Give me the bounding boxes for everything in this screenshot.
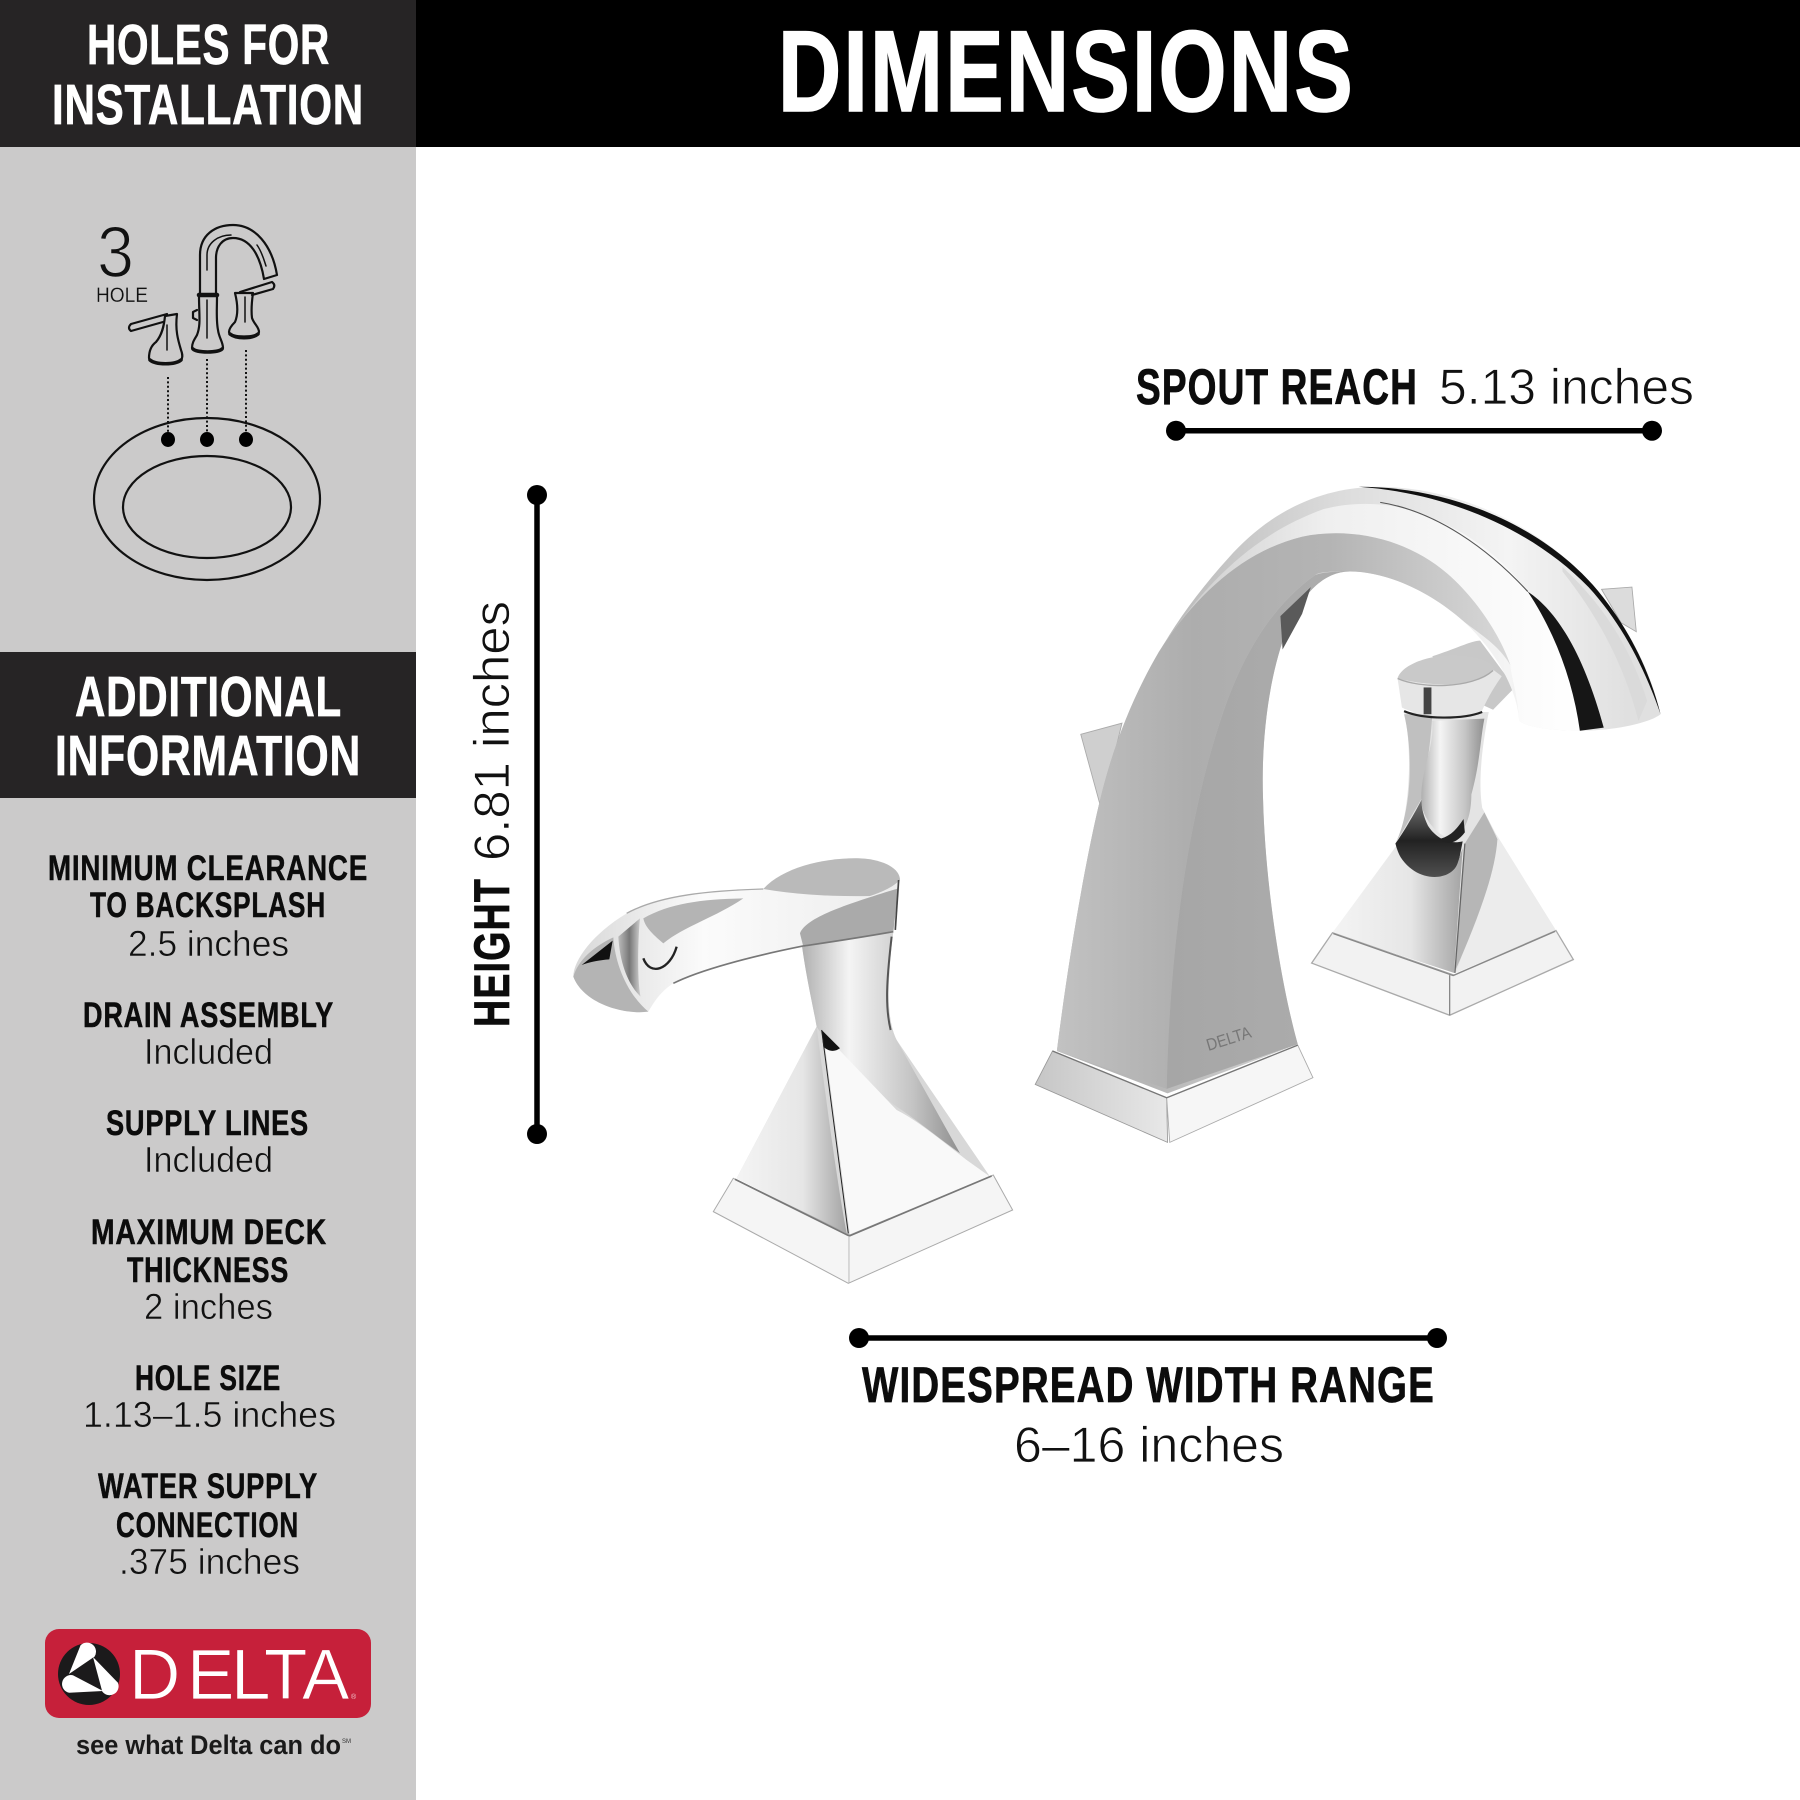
label: 3 hole: 3	[97, 213, 134, 293]
back lever tabs	[1081, 587, 1636, 806]
text block: water supply connection: .375 inches	[119, 1541, 300, 1582]
dimension: widespread width range: 6–16 inches	[1014, 1417, 1284, 1473]
dimension: height: HEIGHT	[464, 878, 520, 1027]
heading: holes for installation: INSTALLATION	[52, 73, 364, 137]
icon: basin	[94, 418, 320, 580]
icon: three hole sink diagram	[94, 213, 320, 580]
text block: drain assembly: DRAIN ASSEMBLY	[83, 996, 334, 1035]
text block: hole size	[83, 1359, 336, 1435]
text block: water supply connection	[98, 1467, 318, 1582]
text block: drain assembly: Included	[144, 1031, 273, 1072]
handle lever	[573, 858, 900, 1012]
dimension: height: 6.81 inches	[464, 601, 520, 861]
heading: additional information: INFORMATION	[55, 724, 361, 788]
text block: water supply connection: WATER SUPPLY	[98, 1467, 318, 1506]
label: 3 hole: HOLE	[96, 284, 148, 307]
text block: maximum deck thickness: 2 inches	[144, 1286, 273, 1327]
dimension: spout reach	[1136, 359, 1694, 441]
text block: minimum clearance	[48, 849, 368, 964]
text block: maximum deck thickness: MAXIMUM DECK	[91, 1213, 327, 1252]
text block: water supply connection: CONNECTION	[116, 1506, 299, 1545]
spout body	[1057, 487, 1661, 1093]
text block: supply lines: SUPPLY LINES	[106, 1104, 309, 1143]
heading: holes for installation	[0, 0, 416, 147]
text block: supply lines: Included	[144, 1139, 273, 1180]
dimension: height	[464, 485, 547, 1144]
right handle	[1312, 641, 1573, 1015]
text block: minimum clearance: MINIMUM CLEARANCE	[48, 849, 368, 888]
text block: maximum deck thickness: THICKNESS	[127, 1251, 289, 1290]
label: 3 hole	[96, 213, 148, 307]
handle stem and pyramid	[737, 932, 990, 1235]
brand mark on spout: DELTA	[1204, 1022, 1254, 1055]
dimension: widespread width range: WIDESPREAD WIDTH RANGE	[862, 1357, 1435, 1413]
spout base	[1035, 1045, 1313, 1142]
heading: additional information	[0, 652, 416, 798]
illustration: spout and right handle	[1035, 487, 1661, 1142]
tagline: SM	[342, 1739, 351, 1745]
tagline: see what Delta can do	[76, 1730, 341, 1760]
title: DIMENSIONS	[778, 8, 1355, 136]
text block: minimum clearance: 2.5 inches	[128, 923, 289, 964]
logo: delta: DELTA	[129, 1636, 350, 1715]
dimension: spout reach: 5.13 inches	[1439, 359, 1694, 415]
icon: mounting holes	[161, 432, 253, 447]
text block: minimum clearance: TO BACKSPLASH	[90, 886, 326, 925]
text block: hole size: 1.13–1.5 inches	[83, 1394, 336, 1435]
icon: dotted guides	[168, 350, 246, 433]
icon: delta triangle mark	[58, 1643, 120, 1705]
heading: additional information: ADDITIONAL	[75, 665, 342, 729]
text block: hole size: HOLE SIZE	[135, 1359, 281, 1398]
icon: line art faucet	[129, 225, 277, 364]
title bar: dimensions	[416, 0, 1800, 147]
text block: supply lines	[106, 1104, 309, 1180]
text block: drain assembly	[83, 996, 334, 1072]
text block: maximum deck thickness	[91, 1213, 327, 1327]
dimension: spout reach: SPOUT REACH	[1136, 359, 1418, 415]
illustration: left handle	[573, 858, 1013, 1283]
logo: delta: ®	[351, 1693, 357, 1701]
dimension: widespread width range	[849, 1328, 1447, 1473]
logo: delta	[45, 1629, 371, 1718]
handle base	[713, 1175, 1013, 1283]
panel: sidebar background	[0, 0, 416, 1800]
heading: holes for installation: HOLES FOR	[87, 13, 330, 77]
